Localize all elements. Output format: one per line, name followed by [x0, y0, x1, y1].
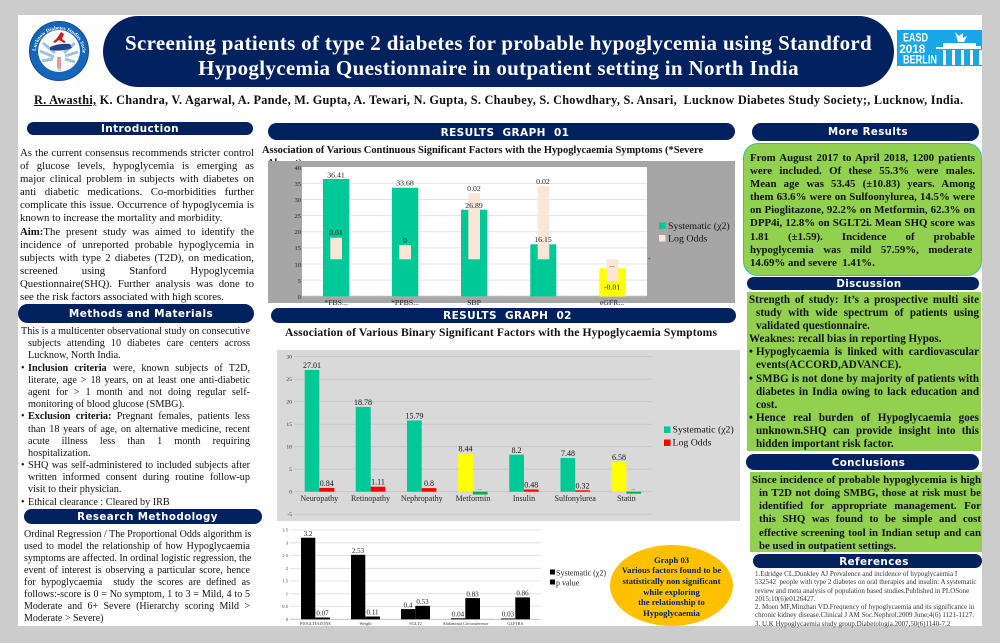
text: research methodology body	[24, 528, 251, 624]
callout: graph 03 note: while exploring	[643, 587, 700, 597]
text: methods body: Inclusion criteria were, known subjects of T2D,	[28, 363, 250, 374]
systematic bars	[305, 370, 575, 492]
y axis labels: 10	[294, 262, 301, 269]
black bars	[301, 538, 530, 619]
value labels: 0.48	[524, 480, 538, 490]
legend	[659, 221, 730, 244]
y axis labels: 5	[298, 278, 301, 285]
text: more results body: were included. Of these 55.3% were males.	[750, 165, 975, 177]
legend: Systematic (χ2)	[672, 424, 734, 436]
heading: Introduction: Introduction	[101, 123, 179, 135]
legend: Systematic (χ2)	[556, 568, 606, 578]
y axis labels: 15	[286, 422, 292, 428]
text: discussion body: Hypoglycaemia is linked with cardiovascular	[756, 346, 979, 358]
systematic bars	[323, 179, 625, 296]
callout: graph 03 note	[610, 545, 733, 626]
text: research methodology body: symptoms are affected. In ordinal logistic regression, the	[24, 553, 251, 564]
text: research methodology body: event of interest is observing a particular score, hence	[24, 565, 250, 576]
value labels: ---	[610, 265, 615, 270]
text: references: 532542 people with type 2 diabetes on oral therapies and insulin: A systematic	[755, 578, 976, 586]
heading: Results Graph 02	[271, 308, 736, 323]
text: research methodology body: Moderate and 6+ Severe (Hierarchy scoring Mild >	[24, 601, 250, 612]
legend: p value	[556, 578, 580, 588]
text: discussion body: study with wide spectrum of patients using	[756, 307, 979, 319]
title banner: Hypoglycemia Questionnaire in outpatient setting in North India	[198, 56, 799, 80]
text: conclusions body: Since incidence of probable hypoglycemia is high	[752, 474, 981, 486]
category labels: Neuropathy	[300, 494, 338, 503]
text: introduction body: subjects with type 2 diabetes (T2D), on medication,	[20, 252, 254, 264]
text: discussion body: •	[749, 346, 753, 358]
text: methods body: Ethical clearance : Cleared by IRB	[28, 497, 170, 508]
heading: Results Graph 01	[268, 123, 735, 140]
value labels: 8.44	[458, 444, 472, 454]
y axis labels: 3	[286, 540, 289, 545]
value labels: 0.84	[320, 479, 334, 488]
heading: Research Methodology: Research Methodology	[77, 511, 218, 523]
legend: Systematic (χ2)	[668, 221, 730, 232]
text: discussion body: hidden important risk factor.	[756, 438, 894, 450]
chart title: graph 02: Association of Various Binary Significant Factors with the Hypoglycaemia Symptoms	[285, 326, 717, 338]
text: conclusions body	[752, 474, 981, 552]
y axis labels: 25	[294, 213, 301, 220]
value labels: 0.01	[329, 228, 343, 237]
text: discussion body: cost.	[756, 399, 777, 411]
text: discussion body: validated questionnaire.	[756, 320, 870, 332]
y axis labels: 35	[294, 181, 301, 188]
text: more results body: DPP4i, 12.8% on SGLT2i. Mean SHQ score was	[750, 217, 975, 229]
callout: graph 03 note: Hypoglycaemia	[643, 608, 700, 618]
category labels: eGFR...	[600, 298, 624, 307]
value labels: 0.83	[466, 590, 479, 598]
text: methods body: visit to their physician.	[28, 484, 121, 495]
category labels: *PPBS...	[391, 298, 419, 307]
heading: Results Graph 01: RESULTS GRAPH 01	[441, 127, 569, 139]
panel: more results	[743, 143, 982, 276]
value labels: 3.2	[304, 530, 313, 538]
y axis labels: 2.5	[282, 553, 289, 558]
text: methods body: •	[21, 460, 25, 471]
text: discussion body: Strength of study: It’s a prospective multi site	[749, 294, 979, 306]
right axis marks: *	[648, 258, 651, 263]
category labels: Abdominal Circumference	[443, 621, 489, 626]
heading: Conclusions	[746, 454, 979, 470]
text: methods body: Lucknow, North India.	[28, 350, 121, 361]
text: discussion body: diabetes in India owing to lack education and	[756, 386, 979, 398]
text: methods body: written informed consent during routine follow-up	[28, 472, 250, 483]
callout: graph 03 note: statistically non significant	[623, 576, 720, 586]
text: references: 2. Moen MF,Minzhan VD.Frequency of hypoglycaemia and its significance in	[755, 603, 974, 611]
text: introduction body: known to increase the mortality and morbidity.	[20, 212, 222, 224]
text: discussion body: •	[749, 412, 753, 424]
text: methods body: agent for > 1 month and not doing regular self-	[28, 387, 250, 398]
log odds bars	[330, 186, 618, 281]
text: references: 2015;10(6)e0126427.	[755, 595, 815, 603]
category labels: Insulin	[513, 494, 535, 503]
text: methods body: hospitalization.	[28, 448, 91, 459]
text: introduction body: major clinical problem in subjects with diabetes on	[20, 173, 254, 185]
y axis labels: 0	[289, 490, 292, 496]
y axis labels	[282, 528, 289, 622]
text: discussion body: •	[749, 373, 753, 385]
value labels: 18.78	[354, 398, 372, 407]
value labels: 1.11	[371, 478, 385, 486]
text: methods body: This is a multicenter observational study on consecutive	[21, 326, 250, 337]
value labels: 0	[403, 236, 407, 245]
text: conclusions body: in T2D not doing SMBG, those at risk must be	[759, 487, 981, 499]
category labels: GLP1RA	[507, 621, 525, 626]
text: research methodology body: for hypoglycaemia study the scores are defined as	[24, 577, 250, 588]
log odds bars	[319, 487, 590, 492]
value labels: 6.58	[612, 453, 626, 462]
text: more results body: hypoglycemia was mild 57.59%, moderate	[750, 244, 972, 256]
text: methods body: •	[21, 411, 25, 422]
text: methods body: SHQ was self-administered to included subjects after	[28, 460, 250, 471]
category labels: Sulfonylurea	[555, 494, 596, 503]
text: discussion body: events(ACCORD,ADVANCE).	[756, 359, 901, 371]
text: research methodology body: follows:-score is 0 = No symptom, 1 to 3 = Mild, 4 to 5	[24, 589, 250, 600]
text: methods body: Exclusion criteria: Pregnant females, patients less	[28, 411, 250, 422]
value labels: 0.04	[452, 610, 465, 618]
legend	[550, 568, 606, 588]
title banner	[103, 16, 894, 87]
text: introduction body: Aim:The present study was aimed to identify the	[20, 226, 254, 238]
chart: graph 02 bar chart	[277, 350, 740, 521]
category labels: SGLT2	[409, 621, 422, 626]
text: methods body	[21, 326, 250, 508]
callout: graph 03 note: the relationship to	[638, 597, 705, 607]
logo: EASD 2018 Berlin: 2018	[899, 44, 926, 56]
heading: Methods and Materials: Methods and Materials	[69, 308, 213, 320]
value labels	[327, 170, 620, 292]
logo: EASD 2018 Berlin: EASD	[903, 33, 928, 45]
value labels: 2.53	[352, 547, 365, 555]
text: discussion body	[749, 294, 979, 450]
value labels: 0.86	[516, 590, 529, 598]
heading: More Results: More Results	[828, 127, 908, 138]
value labels: 27.01	[303, 361, 321, 370]
y axis labels: 0	[286, 617, 289, 622]
value labels: 0.8	[424, 479, 434, 488]
y axis labels	[286, 355, 292, 518]
heading: Methods and Materials	[18, 304, 254, 323]
text: discussion body: unknown.SHQ can provide insight into this	[756, 425, 979, 437]
text: introduction body: anti diabetic medications. Co-morbidities further	[20, 186, 254, 198]
value labels: 0.02	[536, 177, 550, 186]
text: discussion body: Weaknes: recall bias in reporting Hypos.	[749, 333, 942, 345]
value labels: ---	[478, 487, 483, 492]
text: conclusions body: identified for appropriate management. For	[759, 500, 981, 512]
category labels	[300, 494, 636, 503]
text: introduction body: screened using Stanford Hypoglycemia	[20, 265, 254, 277]
value labels	[304, 530, 529, 618]
heading: Introduction	[27, 122, 253, 135]
y axis labels: 0	[298, 294, 301, 301]
y axis labels: 20	[294, 229, 301, 236]
category labels: PIOGLITAZONE	[300, 621, 331, 626]
category labels: Statin	[617, 494, 636, 503]
text: conclusions body: be used in outpatient settings.	[759, 540, 896, 552]
y axis labels: 1.5	[282, 578, 289, 584]
text: references: 3. U.K Hypoglycaemia study group.Diabetologia.2007,50(6)1140-7.2	[755, 620, 950, 628]
heading: Results Graph 02: RESULTS GRAPH 02	[443, 310, 572, 322]
text: introduction body: As the current consensus recommends stricter control	[20, 147, 254, 159]
text: more results body: them 63.6% were on Sulfoonylurea, 14.5% were	[750, 191, 975, 203]
heading: Discussion: Discussion	[836, 279, 902, 290]
callout: graph 03 note: Various factors found to be	[622, 565, 721, 575]
legend: Log Odds	[668, 234, 707, 244]
authors line: R. Awasthi, K. Chandra, V. Agarwal, A. Pande, M. Gupta, A. Tewari, N. Gupta, S. Chaubey, S. Chowdhary, S. Ansari, Lucknow Diabetes Study Society;, Lucknow, India.	[34, 93, 963, 107]
logo: Lucknow Diabetes Study Society: Lucknow Diabetes Studies Society	[32, 26, 86, 53]
text: methods body: •	[21, 363, 25, 374]
category labels: Nephropathy	[401, 494, 443, 503]
y axis labels: 30	[286, 355, 292, 361]
y axis labels: 10	[286, 445, 292, 451]
heading: Research Methodology	[24, 509, 262, 524]
chart title: graph 01: Association of Various Continuous Significant Factors with the Hypoglycaemia Symptoms (*Severe	[262, 145, 703, 156]
text: methods body: literate, age > 18 years, on at least one anti-diabetic	[28, 375, 250, 386]
category labels: Retinopathy	[351, 494, 390, 503]
value labels: 0.4	[404, 602, 413, 610]
value labels: 0.53	[416, 598, 429, 606]
heading: References: References	[839, 556, 909, 568]
text: conclusions body: this SHQ was found to be simple and cost	[759, 513, 981, 525]
value labels: 15.79	[406, 412, 424, 420]
category labels: *FBS...	[324, 298, 348, 307]
logo: EASD 2018 Berlin	[897, 30, 982, 66]
text: references: chronic kidney disease.Clinical J AM Soc.Nephrol.2009 June;4(6) 1121-1127.	[755, 611, 974, 619]
text: more results body	[750, 152, 975, 269]
text: discussion body: Hence real burden of Hypoglycaemia goes	[756, 412, 979, 424]
text: references	[755, 570, 976, 628]
chart: graph 01 bar chart	[268, 161, 735, 303]
category labels: SBP	[467, 298, 482, 307]
value labels: ---	[632, 487, 636, 492]
value labels: 0.03	[502, 610, 515, 618]
text: methods body: subjects attending 10 diabetes care centers across	[28, 338, 250, 349]
value labels	[303, 361, 636, 492]
value labels: 0.02	[467, 184, 481, 193]
legend	[664, 424, 734, 448]
text: methods body: acute illness less than 1 month requiring	[28, 436, 250, 447]
text: discussion body: SMBG is not done by majority of patients with	[756, 373, 979, 385]
category labels	[324, 298, 624, 307]
text: research methodology body: Moderate > Severe)	[24, 613, 104, 624]
category labels: Metformin	[456, 494, 490, 503]
text: methods body: than 18 years of age, on alternative medicine, recent	[28, 424, 250, 434]
y axis labels: 15	[294, 245, 301, 252]
text: conclusions body: effective screening tool in Indian setup and can	[759, 527, 981, 539]
y axis labels: 5	[289, 467, 292, 473]
y axis labels: 0.5	[282, 604, 289, 609]
value labels: 8.2	[512, 446, 522, 455]
text: introduction body	[20, 147, 254, 303]
value labels: 36.41	[327, 170, 345, 180]
category labels: Weight	[359, 621, 372, 626]
text: more results body: Mean age was 53.45 (±10.83) years. Among	[750, 178, 975, 190]
panel: conclusions	[750, 472, 982, 552]
text: references: 1.Edridge CL,Dunkley AJ Prevalence and incidence of hypoglycaemia I	[755, 570, 957, 578]
value labels: 33.68	[396, 178, 414, 188]
y axis labels: 40	[294, 165, 301, 172]
value labels: 0.11	[366, 608, 379, 616]
text: methods body: monitoring of blood glucose (SMBG).	[28, 399, 184, 410]
text: research methodology body: Ordinal Regression / The Proportional Odds algorithm is	[24, 528, 251, 540]
y axis labels: 20	[286, 400, 292, 406]
heading: References	[753, 554, 982, 568]
text: more results body: 14.69% and severe 1.41%.	[750, 257, 875, 269]
heading: Conclusions: Conclusions	[832, 457, 905, 469]
value labels: 0.07	[316, 610, 329, 618]
text: methods body: •	[21, 497, 25, 508]
text: introduction body: complicate this issue. Occurrence of hypoglycemia is	[20, 199, 254, 211]
y axis labels	[294, 165, 301, 301]
y axis labels: 30	[294, 197, 301, 204]
value labels: 7.48	[561, 449, 575, 458]
category labels	[300, 621, 525, 626]
title banner: Screening patients of type 2 diabetes for probable hypoglycemia using Standford	[125, 31, 872, 55]
text: more results body: From August 2017 to April 2018, 1200 patients	[750, 152, 975, 164]
logo: Lucknow Diabetes Study Society: Lucknow	[57, 68, 61, 71]
value labels: -0.01	[604, 282, 620, 292]
y axis labels: -5	[287, 512, 292, 518]
logo: Lucknow Diabetes Study Society	[29, 21, 89, 81]
text: more results body: 1.81 (±1.59). Incidence of probable	[750, 231, 975, 243]
text: introduction body: Questionnaire(SHQ). Further analysis was done to	[20, 278, 254, 290]
panel: discussion	[747, 292, 981, 451]
chart title: graph 01	[262, 145, 703, 161]
text: introduction body: of glucose levels, hypoglycemia is emerging as	[20, 160, 254, 172]
y axis labels: 3.5	[282, 528, 289, 532]
callout: graph 03 note: Graph 03	[654, 554, 689, 564]
yellow bars	[458, 454, 626, 492]
legend: Log Odds	[672, 438, 712, 448]
y axis labels: 2	[286, 566, 289, 571]
text: research methodology body: used to model the relationship of how Hypoglycaemia	[24, 541, 250, 552]
heading: More Results	[752, 123, 979, 141]
value labels: 16.15	[534, 235, 552, 244]
value labels: 0.32	[576, 482, 590, 490]
value labels: 26.89	[465, 201, 483, 210]
text: references: review and meta analysis of population based studies.Published in PLOSone	[755, 587, 969, 595]
chart: graph 03 bar chart	[282, 528, 606, 626]
text: introduction body: see the risk factors associated with high scores.	[20, 291, 224, 303]
y axis labels: 1	[286, 591, 289, 596]
text: introduction body: incidence of unreported probable hypoglycemia in	[20, 239, 254, 251]
heading: Discussion	[747, 277, 979, 290]
text: more results body: on Pioglitazone, 92.2% on Metformin, 62.3% on	[750, 204, 975, 216]
y axis labels: 25	[286, 377, 292, 383]
